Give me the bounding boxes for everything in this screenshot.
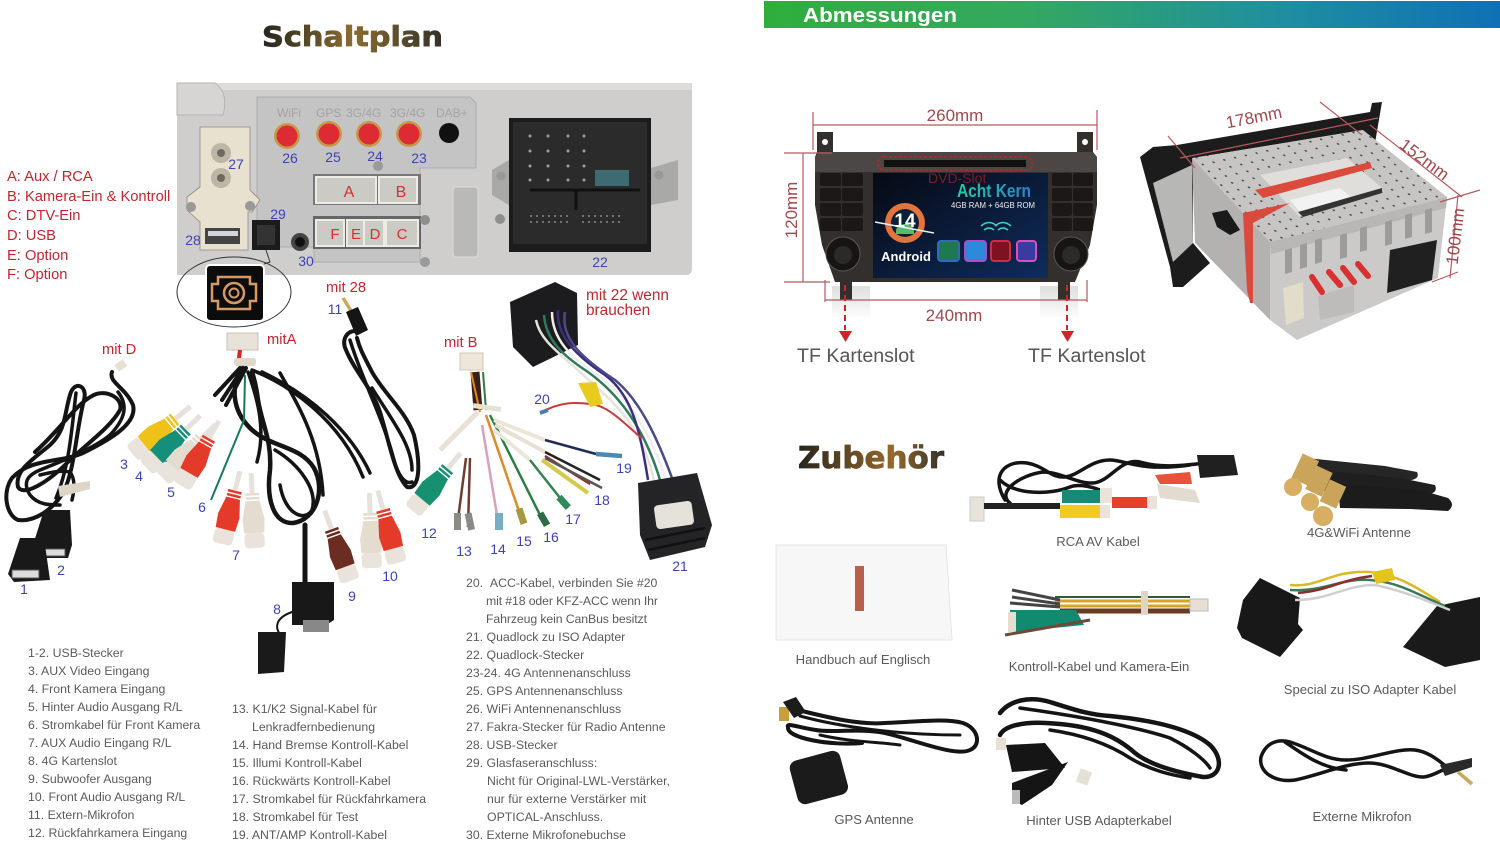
- legend: connector letters: F: Option: [7, 267, 67, 283]
- parts list: 1-12: 5. Hinter Audio Ausgang R/L: [28, 700, 183, 714]
- parts list: 20-30: 28. USB-Stecker: [466, 738, 558, 752]
- port numbers: 23: [411, 150, 427, 166]
- parts list: 20-30: 26. WiFi Antennenanschluss: [466, 702, 621, 716]
- cable numbers: 10: [382, 568, 398, 584]
- parts list: 1-12: 7. AUX Audio Eingang R/L: [28, 736, 172, 750]
- parts list: 20-30: 20. ACC-Kabel, verbinden Sie #20: [466, 576, 658, 590]
- parts list: 20-30: 21. Quadlock zu ISO Adapter: [466, 630, 625, 644]
- callout: optical socket detail: [177, 250, 291, 327]
- icon: android badge: [875, 203, 934, 264]
- dimension: 120mm: [782, 153, 832, 282]
- label: TF Kartenslot left: TF Kartenslot: [797, 345, 915, 367]
- mic jack 30: [291, 233, 309, 251]
- parts list: 1-12: 4. Front Kamera Eingang: [28, 682, 166, 696]
- dimension: 240mm: 240mm: [926, 306, 982, 325]
- dimension: 152mm: [1370, 125, 1462, 197]
- parts list: 20-30: 25. GPS Antennenanschluss: [466, 684, 623, 698]
- icon: wifi: [981, 222, 1011, 230]
- parts list: 20-30: 23-24. 4G Antennenanschluss: [466, 666, 631, 680]
- cable numbers: 1: [20, 581, 28, 597]
- parts list: 1-12: 8. 4G Kartenslot: [28, 754, 117, 768]
- connector blocks F E D C: [313, 216, 421, 249]
- dimension: 260mm: [813, 106, 1097, 150]
- parts list: 1-12: 12. Rückfahrkamera Eingang: [28, 826, 187, 840]
- connector blocks F E D C: C: [397, 226, 408, 243]
- port numbers: [185, 148, 608, 270]
- connector blocks A B: A: [344, 184, 355, 201]
- port numbers: 30: [298, 253, 314, 269]
- parts list: 20-30: mit #18 oder KFZ-ACC wenn Ihr: [486, 594, 658, 608]
- port numbers: 25: [325, 149, 341, 165]
- optical socket 29: [252, 220, 280, 250]
- cable numbers: 4: [135, 468, 143, 484]
- title: Schaltplan: Schaltplan: [262, 20, 443, 53]
- connector blocks F E D C: F: [330, 226, 340, 243]
- rear fins: [1285, 208, 1432, 274]
- connector blocks A B: [313, 174, 421, 205]
- buttons right: [1052, 173, 1093, 231]
- dimension: 152mm: 152mm: [1396, 135, 1453, 184]
- accessory captions: GPS Antenne: [834, 812, 914, 827]
- cable numbers: 18: [594, 492, 610, 508]
- red connection notes: mit 28: [326, 280, 366, 296]
- parts list: 1-12: 10. Front Audio Ausgang R/L: [28, 790, 185, 804]
- cable numbers: 14: [490, 541, 506, 557]
- buttons left: [820, 173, 863, 231]
- accessory captions: RCA AV Kabel: [1056, 534, 1140, 549]
- port numbers: 28: [185, 232, 201, 248]
- cable numbers: 20: [534, 391, 550, 407]
- legend: connector letters: C: DTV-Ein: [7, 208, 80, 224]
- cable numbers: 9: [348, 588, 356, 604]
- cable numbers: 16: [543, 529, 559, 545]
- dimension: 260mm: 260mm: [927, 106, 983, 125]
- accessory: external microphone: [1261, 741, 1472, 784]
- dimension: 178mm: [1168, 102, 1378, 168]
- icon: android badge: 14: [894, 211, 916, 232]
- parts list: 13-19: 18. Stromkabel für Test: [232, 810, 359, 824]
- accessory captions: Kontroll-Kabel und Kamera-Ein: [1009, 659, 1189, 674]
- product: radio front unit: [815, 132, 1097, 320]
- cable: quadlock to ISO adapter 20-21: [510, 282, 712, 560]
- cable numbers: 3: [120, 456, 128, 472]
- antenna labels: DAB+: [436, 106, 468, 120]
- dimension: 240mm: [825, 280, 1087, 325]
- accessory captions: Special zu ISO Adapter Kabel: [1284, 682, 1456, 697]
- legend: connector letters: A: Aux / RCA: [7, 169, 93, 185]
- cable: external microphone 11: [343, 298, 418, 487]
- parts list: 1-12: 9. Subwoofer Ausgang: [28, 772, 152, 786]
- screen: Acht Kern: [951, 181, 1035, 210]
- port numbers: 26: [282, 150, 298, 166]
- product: radio rear view: [1140, 102, 1480, 340]
- antenna labels: GPS: [316, 106, 341, 120]
- parts list: 13-19: Lenkradfernbedienung: [252, 720, 375, 734]
- parts list: 1-12: 6. Stromkabel für Front Kamera: [28, 718, 200, 732]
- accessory: GPS antenna: [779, 697, 977, 806]
- panel: rear connector plate: [177, 83, 692, 275]
- accessory captions: Handbuch auf Englisch: [796, 652, 930, 667]
- accessory captions: 4G&WiFi Antenne: [1307, 525, 1411, 540]
- accessory: ISO adapter cable: [1237, 568, 1480, 667]
- parts list: 1-12: [28, 646, 200, 840]
- cable numbers: 5: [167, 484, 175, 500]
- accessory: 4G WiFi antennas: [1284, 454, 1452, 526]
- cable numbers: 17: [565, 511, 581, 527]
- sticker: [1255, 158, 1382, 217]
- accessory captions: [796, 525, 1456, 828]
- dimension: 100mm: 100mm: [1443, 207, 1468, 266]
- dimension: 178mm: 178mm: [1224, 103, 1284, 132]
- connector blocks F E D C: D: [370, 226, 381, 243]
- dimension: 100mm: [1432, 190, 1480, 282]
- legend: connector letters: B: Kamera-Ein & Kontroll: [7, 189, 170, 205]
- port numbers: 29: [270, 206, 286, 222]
- connector blocks F E D C: E: [351, 226, 361, 243]
- cable numbers: 6: [198, 499, 206, 515]
- red connection notes: mit B: [444, 335, 478, 351]
- antenna labels: 3G/4G: [390, 106, 425, 120]
- red connection notes: mit 22 wenn: [586, 287, 669, 304]
- dimension: 120mm: 120mm: [782, 182, 801, 238]
- parts list: 1-12: 3. AUX Video Eingang: [28, 664, 150, 678]
- port numbers: 22: [592, 254, 608, 270]
- parts list: 20-30: 30. Externe Mikrofonebuchse: [466, 828, 626, 842]
- cable: RCA harness 3-10: [125, 333, 408, 674]
- parts list: 20-30: Fahrzeug kein CanBus besitzt: [486, 612, 648, 626]
- cable numbers: 13: [456, 543, 472, 559]
- parts list: 13-19: 16. Rückwärts Kontroll-Kabel: [232, 774, 391, 788]
- fakra block 27 and USB socket 28: [186, 127, 260, 250]
- red connection notes: mitA: [267, 332, 297, 348]
- parts list: 13-19: 17. Stromkabel für Rückfahrkamera: [232, 792, 426, 806]
- red connection notes: brauchen: [586, 302, 650, 319]
- parts list: 1-12: 1-2. USB-Stecker: [28, 646, 124, 660]
- arrow: TF slot right: [1061, 285, 1074, 342]
- antenna labels: [277, 106, 468, 120]
- legend: connector letters: E: Option: [7, 248, 68, 264]
- header bar: Abmessungen: Abmessungen: [803, 5, 957, 27]
- antenna labels: 3G/4G: [346, 106, 381, 120]
- accessory: rear USB cable: [996, 699, 1219, 805]
- volume knobs: [826, 237, 1088, 271]
- red connection notes: mit D: [102, 342, 136, 358]
- parts list: 13-19: 19. ANT/AMP Kontroll-Kabel: [232, 828, 387, 842]
- accessory: Kontroll-Kabel: [1005, 590, 1208, 635]
- accessory: RCA AV Kabel: [970, 455, 1238, 521]
- icons: apps: [938, 241, 1036, 261]
- side grip: [1212, 210, 1240, 235]
- cable numbers: 11: [328, 301, 342, 317]
- parts list: 13-19: [232, 702, 426, 842]
- parts list: 20-30: 27. Fakra-Stecker für Radio Antenne: [466, 720, 666, 734]
- cable numbers: 19: [616, 460, 632, 476]
- cable numbers: 15: [516, 533, 532, 549]
- label: TF Kartenslot right: TF Kartenslot: [1028, 345, 1146, 367]
- DVD slot: DVD-Slot: [928, 170, 986, 186]
- port numbers: 24: [367, 148, 383, 164]
- cable numbers: 8: [273, 601, 281, 617]
- antenna connectors 23-26: [274, 121, 459, 149]
- cable numbers: 21: [672, 558, 688, 574]
- quadlock socket 22: [373, 118, 678, 267]
- red connection notes: [102, 280, 669, 358]
- parts list: 13-19: 15. Illumi Kontroll-Kabel: [232, 756, 362, 770]
- screen: Acht Kern: Acht Kern: [957, 181, 1031, 201]
- antenna labels: WiFi: [277, 106, 301, 120]
- heading: Zubehör: Zubehör: [798, 441, 944, 476]
- rear ports: [1283, 240, 1437, 325]
- icon: android badge: Android: [881, 249, 931, 264]
- legend: connector letters: D: USB: [7, 228, 56, 244]
- parts list: 20-30: OPTICAL-Anschluss.: [487, 810, 603, 824]
- screen: Acht Kern: 4GB RAM + 64GB ROM: [951, 201, 1035, 210]
- cable numbers: 12: [421, 525, 437, 541]
- accessory: user manual: [776, 545, 952, 640]
- cable numbers: 2: [57, 562, 65, 578]
- parts list: 20-30: 22. Quadlock-Stecker: [466, 648, 584, 662]
- cable: control harness 12-19: [404, 353, 622, 531]
- cable numbers: 7: [232, 547, 240, 563]
- parts list: 20-30: 29. Glasfaseranschluss:: [466, 756, 597, 770]
- port numbers: 27: [228, 156, 244, 172]
- accessory captions: Externe Mikrofon: [1313, 809, 1411, 824]
- parts list: 13-19: 13. K1/K2 Signal-Kabel für: [232, 702, 377, 716]
- parts list: 1-12: 11. Extern-Mikrofon: [28, 808, 135, 822]
- connector blocks A B: B: [396, 184, 406, 201]
- parts list: 13-19: 14. Hand Bremse Kontroll-Kabel: [232, 738, 408, 752]
- parts list: 20-30: [466, 576, 670, 842]
- cable: USB 1-2: [6, 359, 134, 582]
- cable numbers: [20, 301, 688, 617]
- DVD slot: [878, 157, 1032, 186]
- parts list: 20-30: Nicht für Original-LWL-Verstärker,: [487, 774, 670, 788]
- parts list: 20-30: nur für externe Verstärker mit: [487, 792, 647, 806]
- accessory captions: Hinter USB Adapterkabel: [1026, 813, 1172, 828]
- legend: connector letters: [7, 169, 170, 283]
- header bar: Abmessungen: [764, 1, 1500, 28]
- red warning strip: [1243, 203, 1290, 303]
- arrow: TF slot left: [839, 285, 852, 342]
